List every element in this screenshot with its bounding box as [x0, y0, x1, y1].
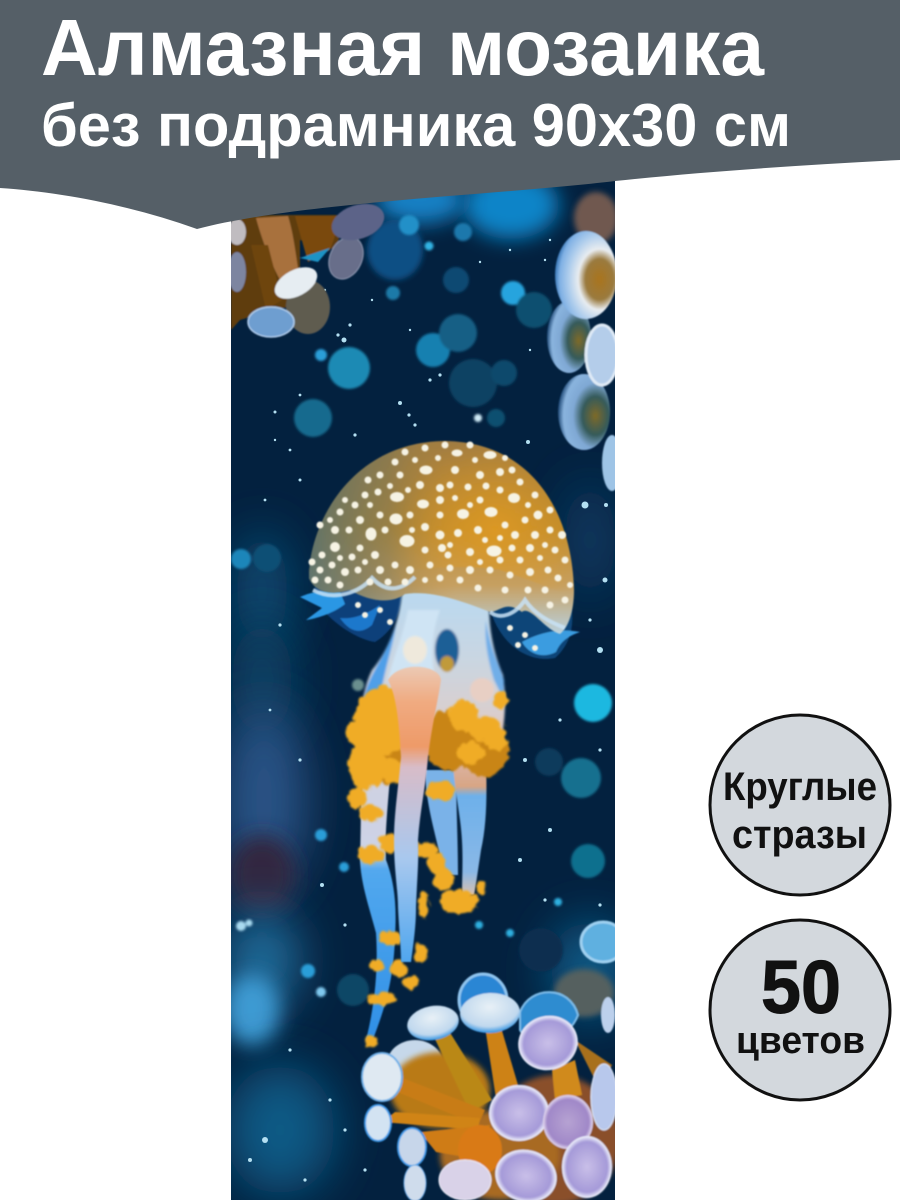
badge: round rhinestones: Круглые — [723, 765, 877, 809]
bell dome — [309, 441, 574, 634]
bell underside fringe — [300, 580, 580, 659]
header banner — [0, 0, 900, 229]
white mushroom caps — [362, 991, 521, 1200]
photo: jellyfish artwork — [222, 170, 630, 1200]
sparkle specks — [248, 239, 608, 1182]
ocean background — [222, 170, 630, 1200]
lavender discs — [489, 997, 617, 1200]
badge: 50 colours: цветов — [736, 1020, 865, 1062]
coral top left — [228, 197, 389, 337]
main tentacle — [388, 667, 441, 962]
title: main heading: Алмазная мозаика — [41, 3, 764, 92]
badge: 50 colours: 50 — [761, 945, 841, 1029]
jellyfish — [300, 441, 580, 1045]
stem pillars — [361, 590, 505, 760]
tentacles back — [360, 740, 486, 1042]
bokeh bubbles — [231, 215, 612, 1006]
badge: round rhinestones — [710, 715, 890, 895]
bell spots — [309, 442, 572, 650]
badge: round rhinestones: стразы — [732, 813, 867, 857]
bell rim highlight — [313, 577, 565, 628]
subtitle: size line: без подрамника 90x30 см — [41, 92, 791, 159]
orange arms — [382, 1024, 612, 1175]
coral bottom right — [362, 922, 625, 1200]
gold oral frills — [343, 684, 506, 1045]
badge: 50 colours — [710, 920, 890, 1100]
discs top right — [547, 192, 622, 491]
